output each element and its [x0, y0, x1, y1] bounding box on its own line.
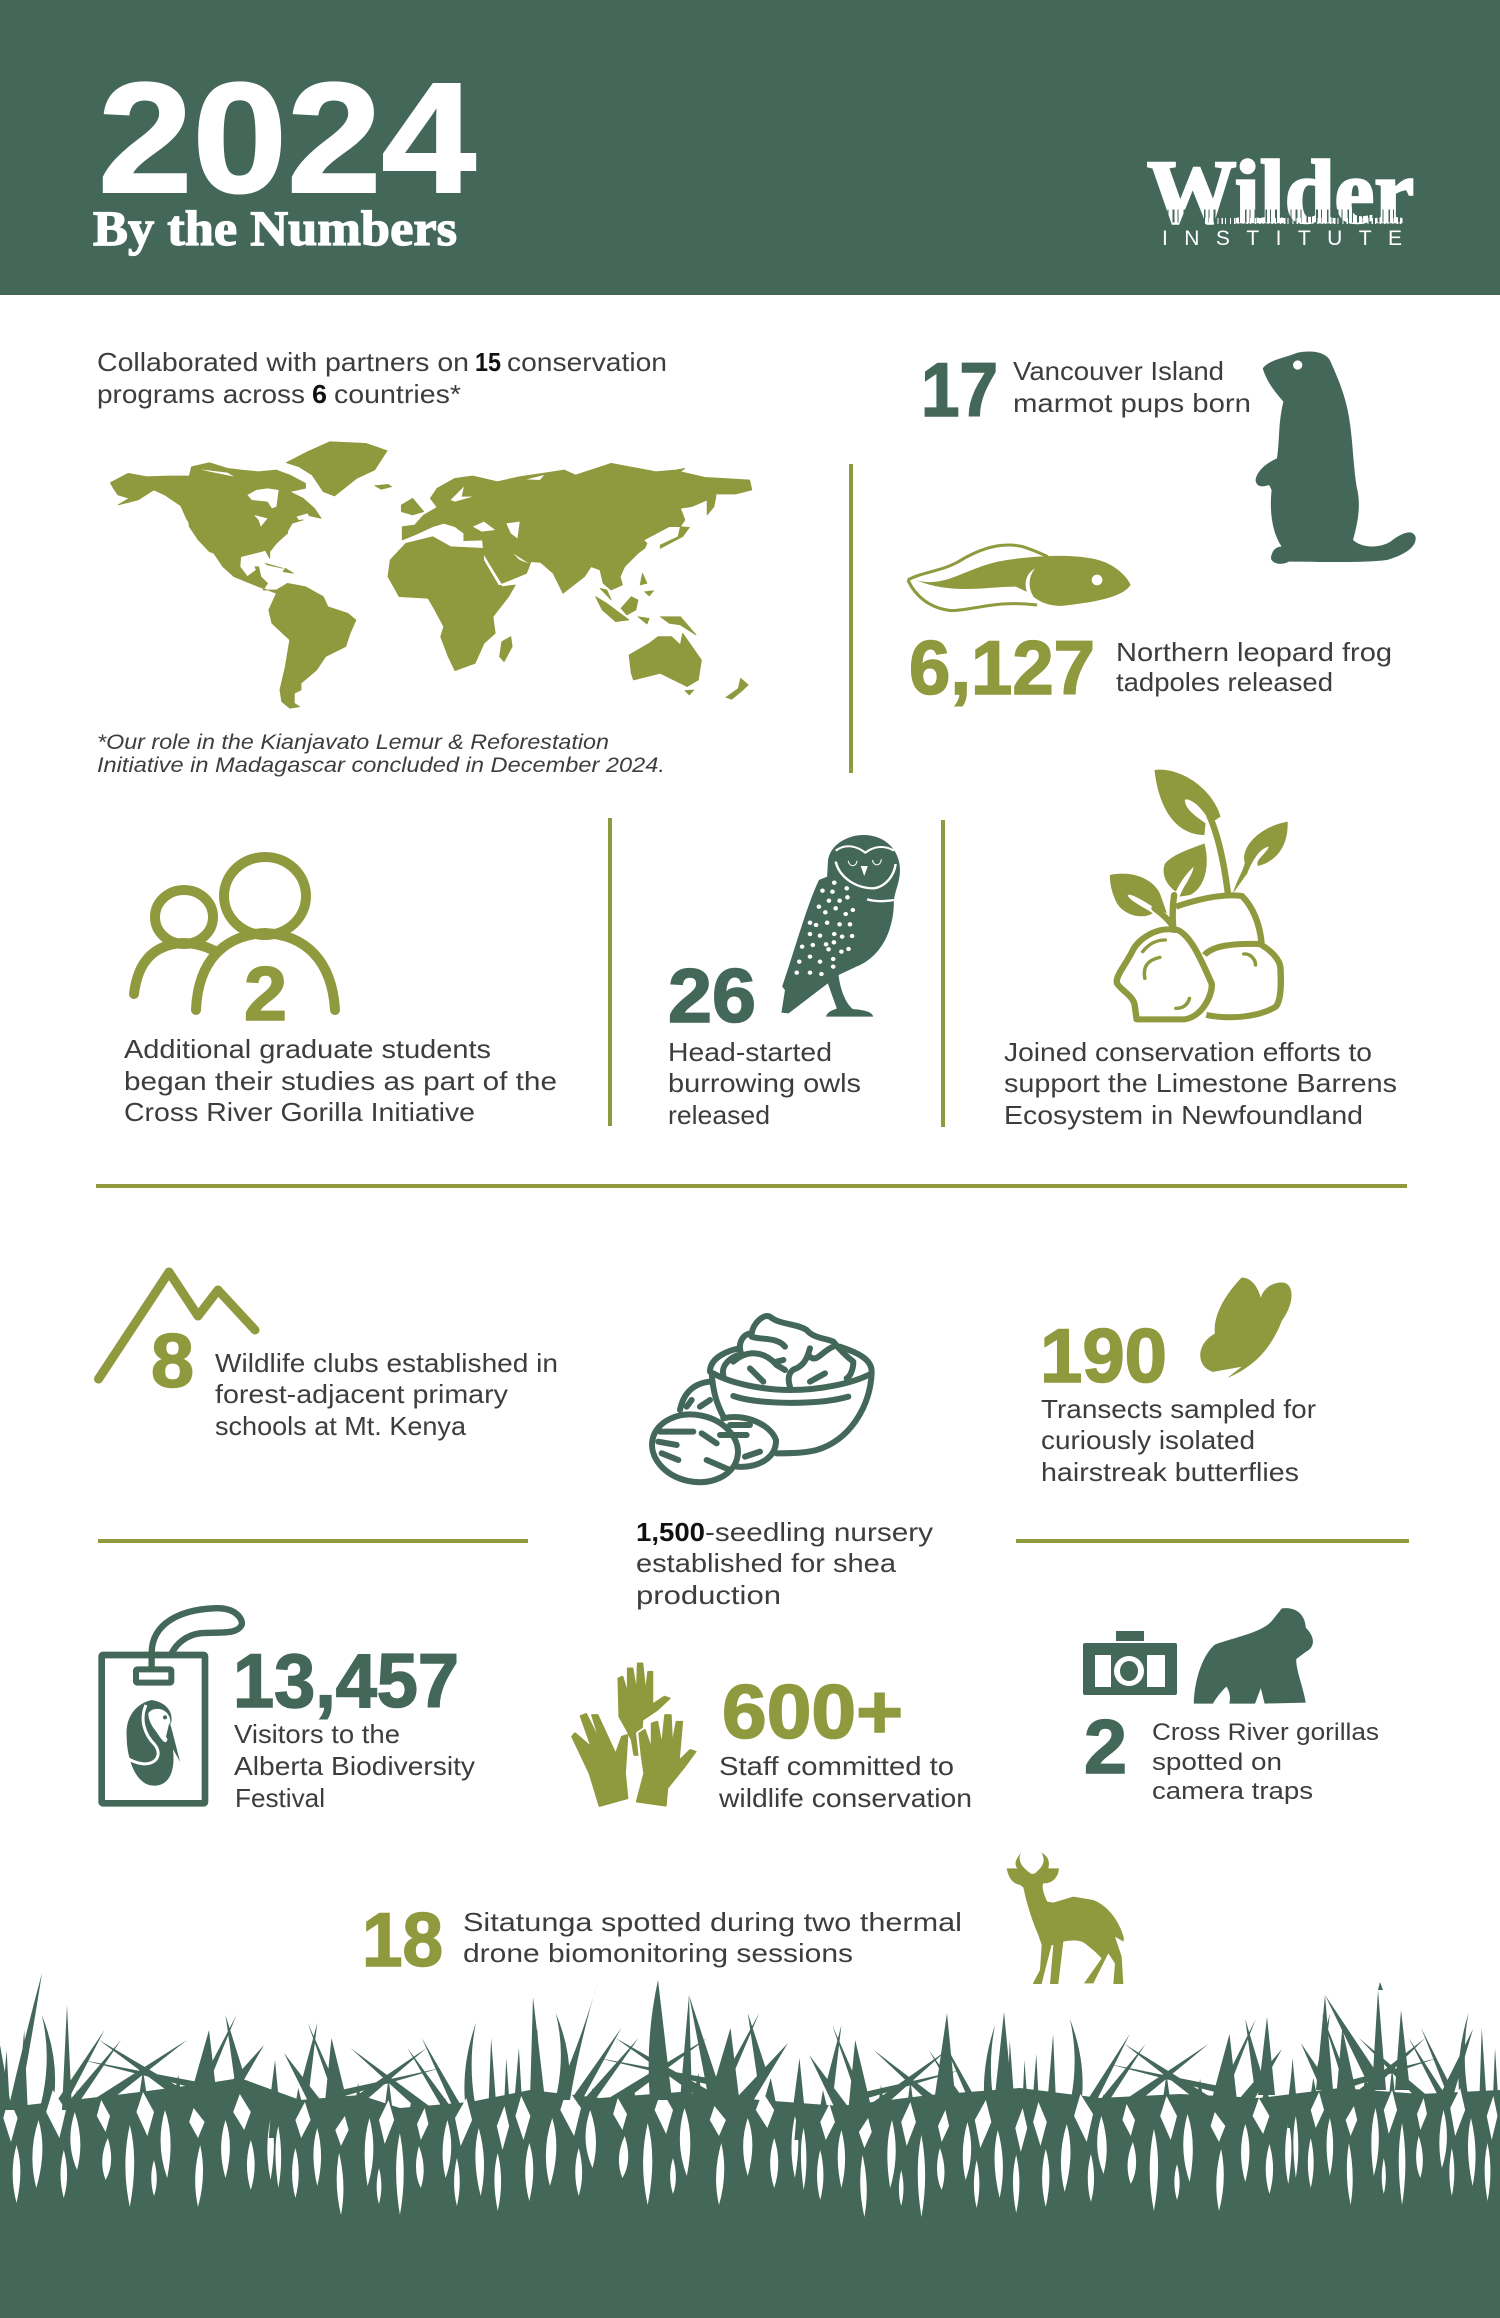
stat: 6,127 tadpoles: Northern leopard frog — [1116, 637, 1392, 667]
icon: burrowing owl — [781, 835, 900, 1017]
stat: 190 transects: Transects sampled for — [1041, 1394, 1316, 1424]
icon: tadpole — [908, 545, 1131, 611]
stat: 17 marmot pups: marmot pups born — [1013, 388, 1251, 418]
icon: sitatunga — [1007, 1853, 1124, 1984]
stat: 2 graduate students — [124, 952, 557, 1127]
icon: butterfly — [1200, 1277, 1292, 1378]
logo: Wilder Institute: Wilder — [1147, 143, 1414, 242]
stat: 13,457 visitors: Visitors to the — [234, 1719, 400, 1749]
icon: shea bowl and nuts — [646, 1316, 872, 1490]
stat: 13,457 visitors: Festival — [235, 1783, 325, 1813]
stat: partners and countries: Collaborated with partners on — [97, 347, 469, 377]
icon: two people — [134, 857, 335, 1010]
stat: 190 transects — [1040, 1314, 1316, 1487]
stat: 8 wildlife clubs: forest-adjacent primary — [215, 1379, 508, 1409]
stat: 2 graduate students: 2 — [244, 952, 287, 1037]
stat: partners and countries: programs across — [97, 379, 305, 409]
stat: partners and countries — [97, 347, 667, 409]
stat: limestone barrens: Joined conservation efforts to — [1004, 1037, 1372, 1067]
icon: festival badge — [102, 1608, 242, 1803]
stat: 18 sitatunga — [362, 1898, 962, 1983]
stat: 1,500 seedling nursery: 1,500 — [636, 1517, 705, 1547]
stat: partners and countries: countries* — [334, 379, 461, 409]
stat: limestone barrens: support the Limestone Barrens — [1004, 1068, 1397, 1098]
stat: 17 marmot pups — [921, 348, 1251, 433]
stat: 190 transects: 190 — [1040, 1314, 1167, 1399]
stat: 1,500 seedling nursery — [636, 1517, 933, 1610]
stat: 6,127 tadpoles: tadpoles released — [1116, 667, 1333, 697]
stat: 17 marmot pups: 17 — [921, 348, 998, 433]
stat: 6,127 tadpoles — [909, 626, 1392, 711]
stat: partners and countries: conservation — [507, 347, 667, 377]
stat: 2 graduate students: Additional graduate students — [124, 1034, 491, 1064]
stat: 26 burrowing owls: 26 — [668, 954, 756, 1039]
icon: camera — [1083, 1631, 1177, 1695]
logo: Wilder Institute: INSTITUTE — [1162, 227, 1402, 250]
subtitle: By the Numbers — [93, 200, 457, 256]
stat: 2 gorillas on camera traps — [1084, 1705, 1379, 1805]
footer grass — [0, 1973, 1500, 2318]
stat: limestone barrens: Ecosystem in Newfoundland — [1004, 1100, 1363, 1130]
title: 2024 — [98, 51, 476, 226]
stat: 600+ staff: Staff committed to — [719, 1751, 954, 1781]
stat: 13,457 visitors: 13,457 — [233, 1639, 459, 1724]
stat: 2 gorillas on camera traps: camera traps — [1152, 1778, 1313, 1805]
footnote — [97, 731, 665, 777]
icon: mountains — [98, 1272, 255, 1379]
stat: 6,127 tadpoles: 6,127 — [909, 626, 1095, 711]
stat: 8 wildlife clubs — [151, 1319, 558, 1441]
stat: partners and countries: 6 — [312, 379, 327, 409]
stat: 1,500 seedling nursery: production — [636, 1580, 781, 1610]
stat: 2 gorillas on camera traps: Cross River gorillas — [1152, 1719, 1379, 1746]
stat: 26 burrowing owls: released — [668, 1100, 770, 1130]
stat: 2 gorillas on camera traps: 2 — [1084, 1705, 1127, 1790]
stat: partners and countries: 15 — [475, 347, 501, 377]
stat: 190 transects: hairstreak butterflies — [1041, 1457, 1299, 1487]
stat: 18 sitatunga: Sitatunga spotted during two thermal — [463, 1907, 962, 1937]
icon: limestone rocks and seedlings — [1110, 770, 1288, 1019]
stat: 26 burrowing owls — [668, 954, 861, 1130]
stat: limestone barrens — [1004, 1037, 1397, 1130]
stat: 18 sitatunga: 18 — [362, 1898, 443, 1983]
stat: 8 wildlife clubs: 8 — [151, 1319, 194, 1404]
stat: 8 wildlife clubs: Wildlife clubs established in — [215, 1348, 558, 1378]
stat: 2 gorillas on camera traps: spotted on — [1152, 1749, 1282, 1776]
stat: 1,500 seedling nursery: -seedling nursery — [705, 1517, 933, 1547]
stat: 8 wildlife clubs: schools at Mt. Kenya — [215, 1411, 467, 1441]
stat: 1,500 seedling nursery: established for shea — [636, 1548, 897, 1578]
footnote: *Our role in the Kianjavato Lemur & Reforestation — [97, 731, 609, 754]
stat: 13,457 visitors — [233, 1639, 475, 1813]
icon: gorilla — [1194, 1608, 1313, 1704]
stat: 18 sitatunga: drone biomonitoring sessions — [463, 1938, 853, 1968]
world map — [110, 442, 752, 708]
stat: 26 burrowing owls: burrowing owls — [668, 1068, 861, 1098]
stat: 600+ staff — [718, 1670, 972, 1813]
stat: 17 marmot pups: Vancouver Island — [1013, 356, 1224, 386]
icon: raised hands — [572, 1663, 695, 1806]
header banner — [0, 0, 1500, 295]
stat: 190 transects: curiously isolated — [1041, 1425, 1255, 1455]
stat: 600+ staff: 600+ — [722, 1670, 903, 1755]
stat: 13,457 visitors: Alberta Biodiversity — [234, 1751, 475, 1781]
stat: 600+ staff: wildlife conservation — [718, 1783, 972, 1813]
stat: 2 graduate students: Cross River Gorilla Initiative — [124, 1097, 475, 1127]
icon: marmot — [1256, 351, 1416, 564]
stat: 2 graduate students: began their studies as part of the — [124, 1066, 557, 1096]
stat: 26 burrowing owls: Head-started — [668, 1037, 832, 1067]
footnote: Initiative in Madagascar concluded in December 2024. — [97, 754, 665, 777]
